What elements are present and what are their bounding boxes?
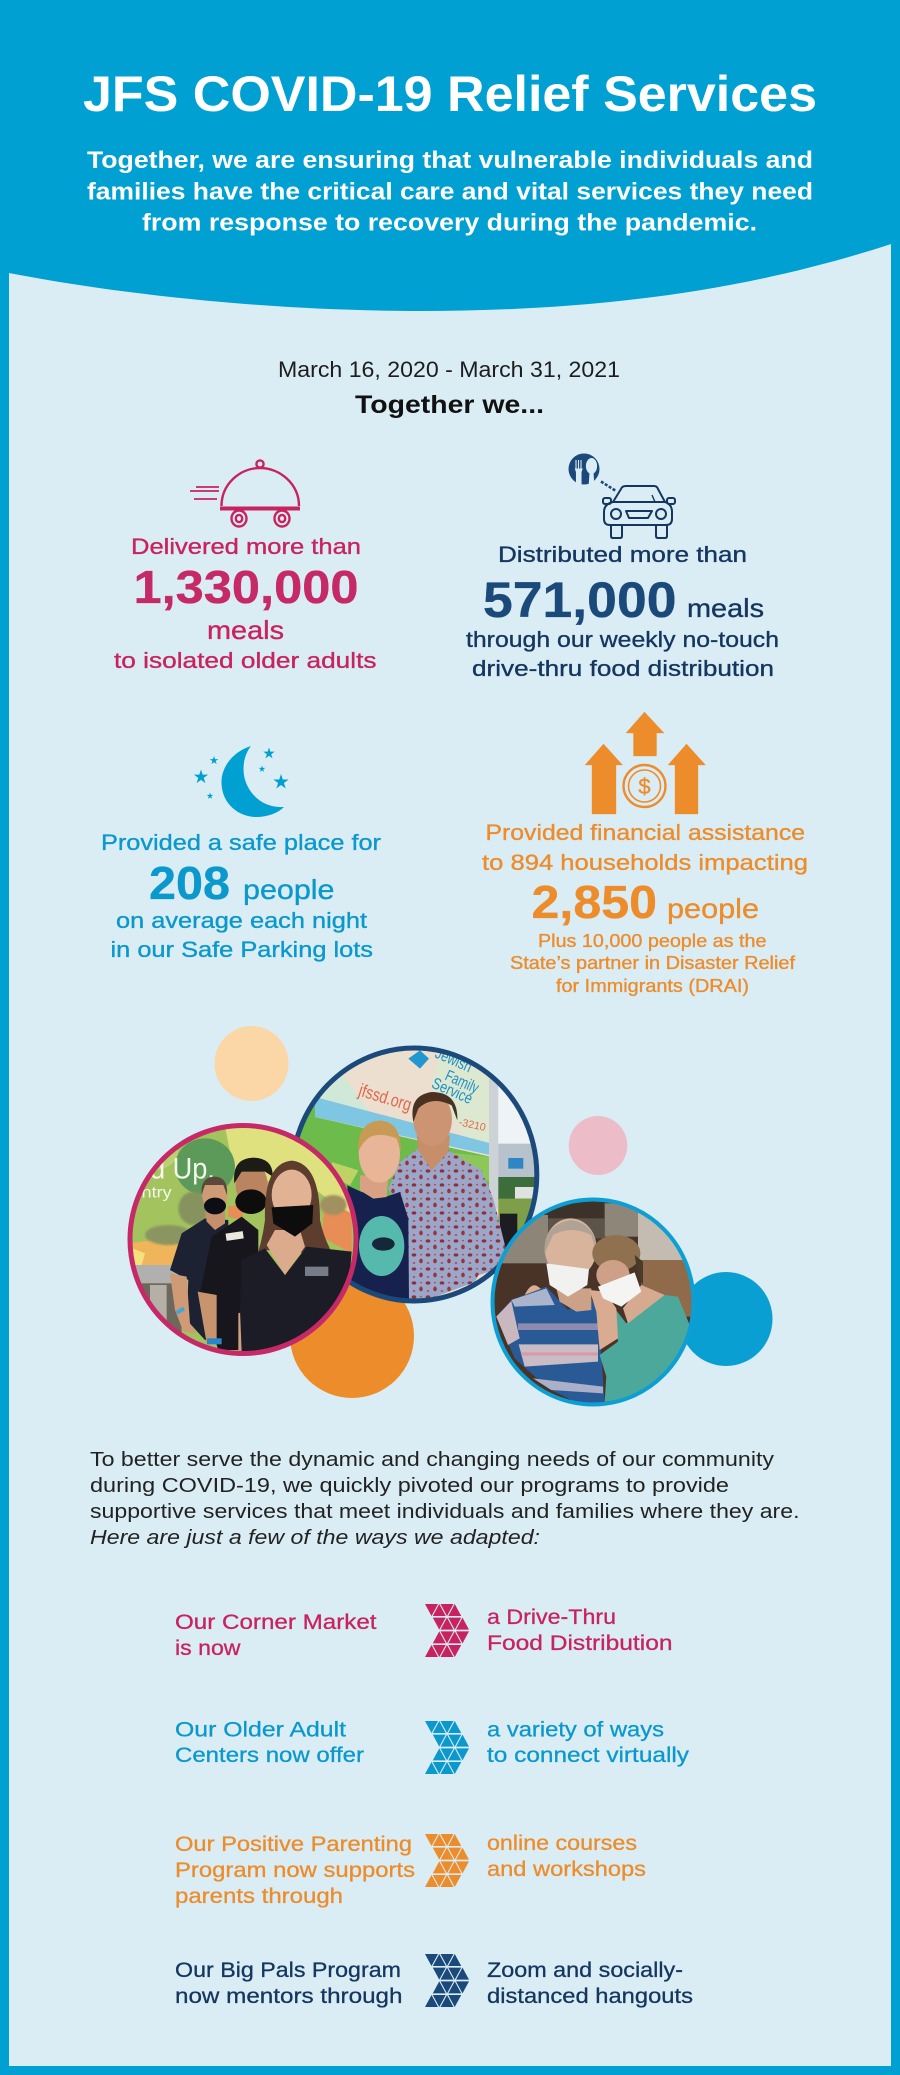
woman [590, 1235, 690, 1402]
man in floral shirt [388, 1092, 507, 1300]
text: to 894 households impacting: to 894 households impacting [482, 850, 808, 875]
text: to isolated older adults: to isolated older adults [114, 648, 376, 673]
photo: boy and man in front of JFS sign: Family [442, 1067, 481, 1097]
decorative circle: orange [290, 1274, 414, 1398]
left text: Our Big Pals Program [175, 1958, 401, 1982]
paragraph: how we adapted: supportive services that meet individuals and families where they are. [90, 1500, 800, 1523]
paragraph: how we adapted [90, 1448, 800, 1549]
text: plus 10,000 people [510, 930, 796, 996]
right text [487, 1958, 693, 2008]
photo: boy and man in front of JFS sign: Jewish [432, 1045, 474, 1076]
icon: triangle chevron [425, 1604, 469, 1657]
text: provided a safe place for: Provided a safe place for [101, 830, 382, 855]
text: delivered more than: Delivered more than [131, 534, 361, 559]
photo: boy and man in front of JFS sign [295, 1046, 540, 1304]
left text [175, 1610, 377, 1660]
left text: Program now supports [175, 1858, 415, 1882]
row: positive parenting [175, 1831, 646, 1908]
left text [175, 1958, 402, 2008]
number: 571,000: 571,000 [483, 572, 676, 628]
right text: and workshops [487, 1857, 646, 1881]
text: meals: meals [207, 615, 284, 645]
text: provided financial assistance: Provided financial assistance [486, 820, 805, 845]
text: people: people [667, 893, 759, 924]
right text: a Drive-Thru [487, 1605, 616, 1629]
text: distributed more than: Distributed more than [498, 542, 747, 567]
right text [487, 1605, 672, 1655]
icon: moon and stars [194, 746, 289, 817]
icon: triangle chevron [425, 1954, 469, 2007]
icon: arrows and coin: $ [638, 774, 651, 799]
paragraph: how we adapted: Here are just a few of the ways we adapted: [90, 1526, 540, 1549]
right text: Zoom and socially- [487, 1958, 683, 1982]
right text: online courses [487, 1831, 637, 1855]
photo: masked staff: d Up. [150, 1152, 215, 1185]
text: meals: meals [687, 593, 764, 623]
paragraph: how we adapted: during COVID-19, we quickly pivoted our programs to provide [90, 1474, 729, 1497]
icon: triangle chevron [425, 1834, 469, 1887]
left text [175, 1832, 415, 1908]
right text: Food Distribution [487, 1631, 672, 1655]
middle man [198, 1158, 273, 1350]
photo: boy and man in front of JFS sign: jfssd.org [356, 1080, 414, 1115]
left text: Our Corner Market [175, 1610, 377, 1634]
number: 2,850: 2,850 [532, 876, 657, 928]
row: big pals [175, 1954, 693, 2008]
boy in navy shirt [347, 1120, 409, 1300]
icon: car with fork and spoon [568, 454, 675, 538]
heading: together we: Together we... [355, 391, 544, 419]
left text: is now [175, 1636, 241, 1660]
row: older adult centers [175, 1718, 689, 1774]
subtitle: families have the critical care and vital services they need [87, 178, 813, 206]
icon: triangle chevron [425, 1721, 469, 1774]
right text: to connect virtually [487, 1743, 689, 1767]
decorative circle: blue [680, 1272, 772, 1366]
number: 1,330,000: 1,330,000 [134, 561, 358, 613]
text: in our safe parking lots: in our Safe Parking lots [110, 937, 373, 962]
left text: now mentors through [175, 1984, 402, 2008]
text: people: people [243, 874, 334, 905]
date range: March 16, 2020 - March 31, 2021 [278, 357, 620, 382]
icon: arrows and coin [585, 712, 706, 814]
left text: Our Positive Parenting [175, 1832, 412, 1856]
photo: boy and man in front of JFS sign: -3210 [458, 1117, 487, 1134]
panel: financial assistance [482, 712, 808, 996]
right text [487, 1831, 646, 1881]
panel: delivered meals [114, 460, 376, 673]
back man [170, 1177, 228, 1340]
row: corner market [175, 1604, 672, 1660]
left text: Centers now offer [175, 1743, 364, 1767]
right text: distanced hangouts [487, 1984, 693, 2008]
man [496, 1218, 605, 1403]
subtitle [87, 147, 813, 236]
left text: Our Older Adult [175, 1718, 346, 1742]
decorative circle: pink [569, 1116, 627, 1175]
photo: masked staff: ntry [142, 1184, 172, 1201]
subtitle: from response to recovery during the pandemic. [142, 210, 757, 236]
panel: distributed meals [466, 454, 779, 681]
paragraph: how we adapted: To better serve the dynamic and changing needs of our community [90, 1448, 775, 1471]
right text: a variety of ways [487, 1718, 664, 1742]
left text: parents through [175, 1884, 343, 1908]
number: 208: 208 [149, 857, 230, 909]
text: on average each night: on average each night [116, 908, 368, 933]
text: plus 10,000 people: State’s partner in Disaster Relief [510, 952, 796, 973]
photo: boy and man in front of JFS sign: Service [429, 1075, 475, 1108]
text: through our weekly no-touch: through our weekly no-touch [466, 627, 779, 652]
text: plus 10,000 people: Plus 10,000 people as the [538, 930, 766, 951]
icon: meal cloche on wheels [190, 460, 300, 526]
right text [487, 1718, 689, 1767]
photo: masked staff [125, 1120, 365, 1360]
text: plus 10,000 people: for Immigrants (DRAI) [556, 975, 749, 996]
text: drive-thru food distribution: drive-thru food distribution [472, 656, 774, 681]
left text [175, 1718, 364, 1767]
photo: older couple in masks [488, 1195, 701, 1410]
subtitle: Together, we are ensuring that vulnerable individuals and [87, 147, 813, 174]
woman [238, 1161, 352, 1353]
panel: safe parking [101, 746, 382, 962]
title: JFS COVID-19 Relief Services [83, 66, 817, 122]
decorative circle: peach [214, 1026, 288, 1101]
